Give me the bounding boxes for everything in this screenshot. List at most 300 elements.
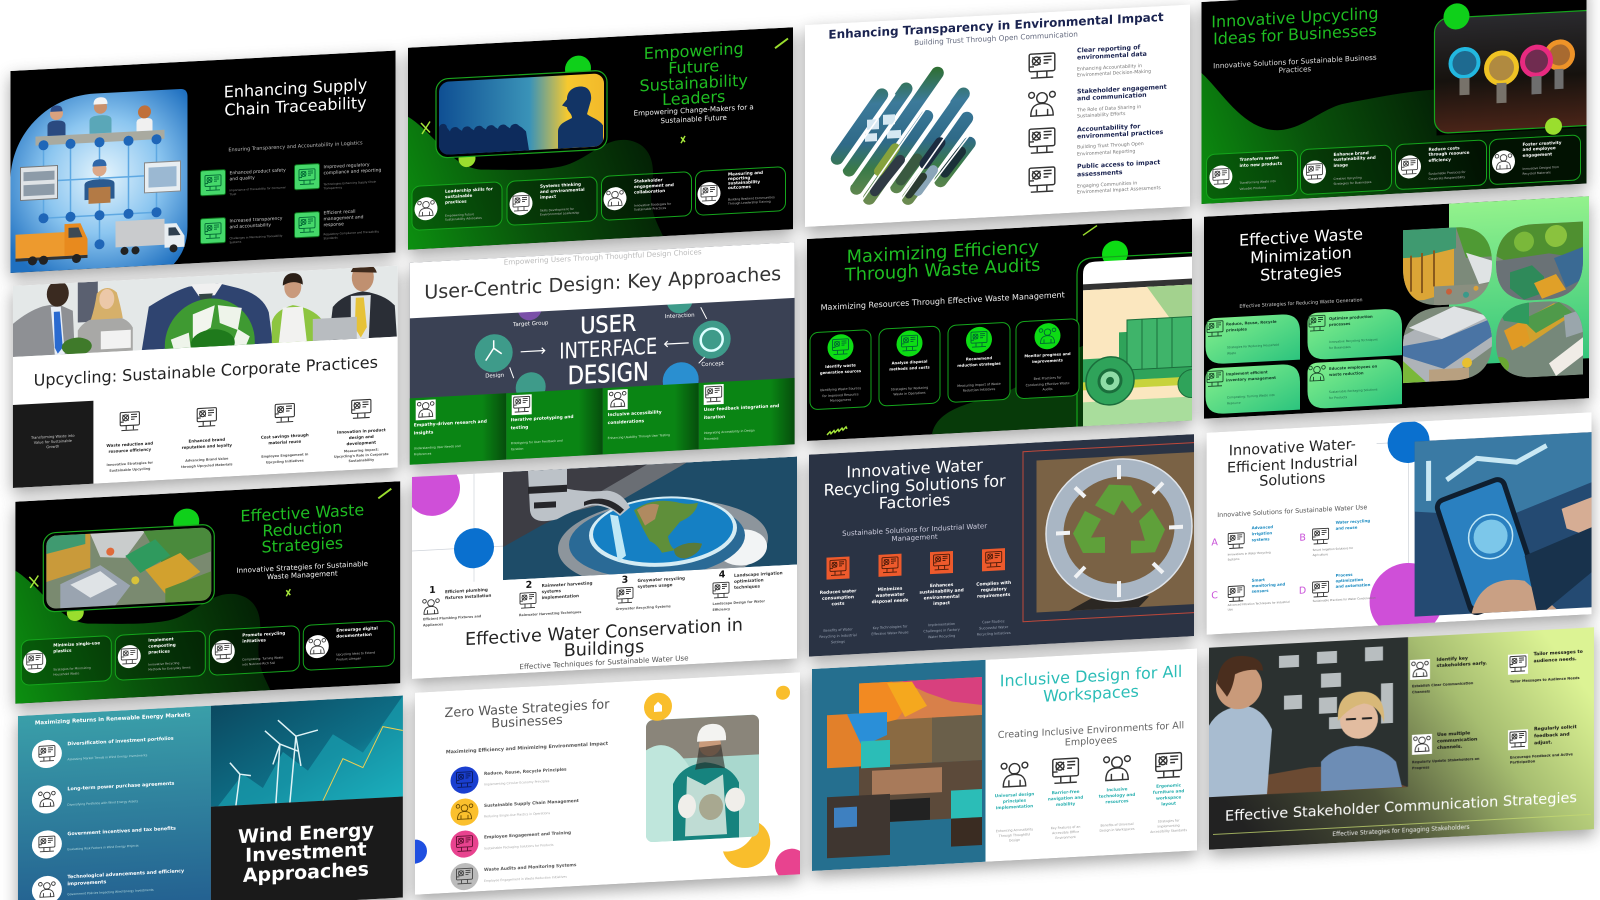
blue circle [1388,420,1430,464]
item: barrier-free: navigation and [1048,795,1083,801]
item: public access: Environmental Impact Assessments [1077,185,1161,196]
item: accountability [1028,124,1163,156]
card: monitor progress: Conducting Effective Waste [1026,381,1069,387]
item: identify stakeholders: Channels [1412,689,1430,694]
green background blob [408,103,663,250]
title: Effective Waste [1239,224,1363,250]
item: enhanced brand: through Upcycled Materials [181,462,232,469]
title: Empowering [644,39,744,63]
card: leadership: practices [445,199,467,205]
card: monitor progress: Monitor progress and [1024,351,1071,358]
item: sustainability: Enhances [930,582,954,589]
slide: Effective Waste Minimization Strategies [1204,196,1590,419]
spark: stroke top [1083,226,1097,235]
light green panel [1449,196,1589,366]
panel heading: Maximizing Returns in Renewable Energy Markets [35,712,191,727]
item: waste audits: Employee Engagement in Waste Reduction Initiatives [484,875,567,883]
decor: yellow home badge [644,692,672,722]
card: transform waste: into new products [1239,161,1283,168]
card: inventory management: inventory management [1226,375,1276,383]
feature: iterative prototyping: Iteration [511,447,524,451]
card: optimize production: processes [1329,321,1351,327]
benefit: recall management: Standards [324,236,338,240]
card: foster creativity: and employee [1522,145,1556,152]
subtitle: Innovative Solutions for Sustainable Business [1213,53,1377,70]
item: clear reporting: Environmental Decision-Making [1077,69,1151,79]
item: inclusive technology [1099,755,1135,833]
benefit: transparency: Challenges in Maintaining Traceability [230,234,283,240]
arrow: concept to interface [665,340,689,347]
item: water consumption: Reduces water [820,588,857,596]
benefit: product safety: and quality [230,175,255,182]
card: reduce costs: Sustainable Practices for [1428,170,1466,176]
isometric recycling plant image [43,507,214,623]
subtitle: Effective Strategies for Engaging Stakeholders [1332,825,1470,838]
card: composting: composting [148,642,176,649]
item: waste reduction [106,411,153,473]
arrow: target group to design [510,367,514,378]
feature: empathy-driven research: Empathy-driven research and [414,419,487,428]
item: technological advancements: improvements [67,879,106,887]
subtitle: Building Trust Through Open Communication [914,29,1078,47]
card: inventory management: Resource [1227,401,1241,405]
feature: inclusive accessibility [608,387,670,440]
subtitle: Effective Strategies for Reducing Waste Generation [1239,297,1363,310]
item C: Smart [1252,577,1265,583]
item: clear reporting: environmental data [1077,51,1147,62]
step 1: 1 [429,585,436,596]
step 3: Greywater recycling [637,575,685,583]
meeting photo [1209,637,1408,798]
item: technological advancements: Government Policies Impacting Wind Energy Investments [67,888,154,896]
tagline: Empowering Users Through Thoughtful Design Choices [504,247,702,267]
card: systems thinking: and environmental [540,187,585,194]
item: multiple channels [1412,730,1480,770]
card: educate employees: Educate employees on [1329,363,1377,371]
item: barrier-free: Accessible Office [1052,830,1079,835]
benefit: regulatory compliance: Improved regulatory [324,162,370,170]
user interface design wordmark: INTERFACE [559,335,657,365]
step 3 [616,571,685,611]
item: ergonomic furniture: Strategies for [1158,818,1180,824]
item: inclusive technology: resources [1105,798,1129,804]
feature: inclusive accessibility: Inclusive accessibility [608,409,662,418]
subtitle: Maximizing Efficiency and Minimizing Environmental Impact [446,741,609,756]
title: Innovative Water- [1229,437,1356,460]
item: waste reduction: resource efficiency [109,447,151,454]
step 4: optimization [734,577,764,584]
title: Businesses [491,713,563,732]
card: leadership: sustainable [445,193,472,199]
card: reduce costs: Reduce costs [1428,145,1460,152]
item: universal design [995,762,1034,843]
item A: A [1211,537,1218,548]
item: wastewater disposal: disposal needs [872,597,909,605]
card: educate employees: waste reduction [1329,370,1364,377]
item A: Systems [1228,557,1240,562]
title: Solutions [1259,470,1325,490]
item: barrier-free [1048,758,1083,840]
card: reduce costs: Corporate Responsibility [1428,175,1465,181]
arrow: interaction to concept [699,307,707,363]
step 2: implementation [542,593,579,600]
item: solicit feedback: Participation [1510,759,1536,765]
slide: Empowering Future Sustainability Leaders [408,27,793,250]
item: enhanced brand: Advancing Brand Value [185,456,229,463]
item: clear reporting [1029,44,1151,81]
subtitle: Sustainable Future [661,113,727,125]
subtitle: Creating Inclusive Environments for All [998,720,1184,741]
card: recommend strategies: Recommend [966,355,992,362]
workflow circles [475,285,731,409]
title: Enhancing Transparency in Environmental Impact [828,10,1164,42]
card: analyze disposal: Analyze disposal [892,359,927,365]
card: optimize production [1308,308,1402,360]
card: recycling initiatives: into Nutrient-Rich Soil [242,661,275,667]
benefit: product safety [200,166,287,198]
card: reduce reuse recycle: Strategies for Reducing Household [1227,343,1279,349]
item: solicit feedback: adjust. [1534,739,1552,746]
item: employee engagement: Employee Engagement and Training [484,830,571,841]
pink circle [1370,561,1444,639]
dark side panel: Growth [46,445,59,449]
item B: Agriculture [1313,552,1328,557]
item: public access: Public access to impact [1077,159,1160,171]
item: barrier-free: Environment [1055,835,1077,840]
feature: iterative prototyping: Iterative prototyping and [511,414,574,423]
title: Minimization [1250,243,1352,267]
spark: lime stroke [775,38,788,48]
item: identify stakeholders [1410,654,1487,695]
item: regulatory: Case Studies: [982,619,1005,624]
title: Reduction [262,517,342,541]
card: recommend strategies: Reduction Initiatives [963,387,996,393]
title: Effective Waste [240,500,364,526]
subtitle: Waste Management [267,569,338,581]
item: sustainable supply chain [450,792,579,826]
item: public access [1028,160,1161,194]
card: identify sources: Identify waste [825,362,856,369]
card: systems thinking: Environmental Leadership [540,211,579,217]
diagram labels [485,311,725,380]
item: sustainability: Challenges in Factory [923,628,960,634]
diagram labels: Interaction [665,313,695,320]
item: multiple channels: channels. [1437,744,1463,751]
feature: user feedback [704,381,779,441]
subtitle: Empowering Change-Makers for a [634,102,754,118]
feature: inclusive accessibility: considerations [608,418,645,426]
card: recycling initiatives: Composting: Turning Waste [242,655,284,662]
slide: Maximizing Efficiency Through Waste Audits [807,218,1206,441]
title: Maximizing Efficiency [847,237,1039,268]
item B: Water recycling [1336,518,1370,525]
benefit: product safety: Importance of Traceability for Consumer [230,185,287,192]
item: wastewater disposal: Minimizes [878,586,903,593]
truck phone illustration [1077,236,1206,427]
subtitle: Effective Techniques for Sustainable Water Use [519,653,689,671]
feature: user feedback: iteration [704,414,725,421]
item D: Process [1336,572,1353,578]
item: water consumption: costs [832,601,845,607]
step 2 [519,576,592,617]
subtitle: Innovative Solutions for Sustainable Water Use [1217,503,1367,519]
card: leadership: Sustainability Advocates [445,216,482,222]
item: employee engagement: Sustainable Packaging Solutions for Products [484,843,554,851]
step 4: Landscape Design for Water [712,599,765,606]
item: sustainable supply chain: Reducing Single-Use Plastics in Operations [484,811,550,819]
worker photo [646,714,759,842]
benefit: transparency: and accountability [230,222,271,230]
title: Innovative Upcycling [1211,4,1378,31]
guide lines [1377,412,1592,626]
card: inventory management: Composting: Turning Waste into [1227,393,1275,399]
dark side panel: Transforming Waste into [30,434,75,440]
item: multiple channels: communication [1437,736,1477,745]
item: inclusive technology: Inclusive [1107,786,1128,792]
item: enhanced brand [181,407,232,469]
spark: lime stroke [378,489,391,498]
item: barrier-free: Key Features of an [1051,825,1080,830]
item: universal design: Universal design [995,791,1034,798]
step 4: Landscape irrigation [734,570,783,578]
step 1 [423,582,491,627]
slide: Upcycling Sustainable Corporate Practices [13,261,398,488]
recycling ring photo [1023,443,1195,622]
item: public access: Engaging Communities in [1077,180,1137,190]
item: regulatory: Successful Water [979,625,1009,631]
card: analyze disposal: Waste in Operations [893,391,926,396]
dark side panel: Value for Sustainable [34,439,73,445]
feature: empathy-driven research: insights [414,429,434,436]
card: enhance brand [1300,145,1392,195]
feature: empathy-driven research [414,397,487,456]
card: foster creativity: Recycled Materials [1522,170,1551,176]
item: universal design: implementation [996,803,1033,810]
spark: zigzag [827,427,847,435]
item: regulatory: Complies with [976,580,1011,588]
card: enhance brand: Creative Upcycling [1333,175,1362,181]
card: transform waste [1206,150,1298,200]
subtitle: Innovative Strategies for Sustainable [237,559,368,575]
title: User-Centric Design: Key Approaches [424,262,781,304]
card: recycling initiatives: initiatives [242,637,266,644]
slide: Innovative Upcycling Ideas for Businesses [1202,0,1600,204]
item: universal design: principles [1003,798,1027,804]
card: minimize plastics: Strategies for Minimizing [53,666,91,672]
subtitle: Employees [1065,735,1117,749]
item: ergonomic furniture: Accessibility Standards [1150,828,1187,834]
card: reduce costs: through resource [1428,150,1470,157]
item: stakeholder engagement: Stakeholder engagement [1077,84,1167,96]
item: ergonomic furniture: Ergonomic [1156,782,1182,789]
card: monitor progress [1016,319,1079,399]
item D: Sustainable Practices for Water Conservation [1313,596,1376,603]
card: digital documentation: Encourage digital [336,625,378,633]
item A: Innovations in Water Recycling [1228,550,1271,557]
card: leadership: Empowering Future [445,212,474,218]
item B [1299,518,1370,558]
item: accountability: environmental practices [1077,129,1164,141]
card: reduce reuse recycle: Waste [1227,351,1236,355]
corporate team photo [13,266,398,357]
card: transform waste: Valuable Products [1239,186,1267,191]
slide: Enhancing Supply Chain Traceability [10,51,396,273]
card: foster creativity: engagement [1522,151,1552,158]
item: solicit feedback: Encourage Feedback and Active [1510,752,1573,760]
card: reduce reuse recycle: Reduce, Reuse, Recycle [1226,319,1277,327]
card: stakeholder engagement: Innovative Strategies for [634,202,672,208]
card: monitor progress: Best Practices for [1034,375,1062,381]
item: enhanced brand: Enhanced brand [189,437,225,444]
item: sustainable supply chain: Sustainable Supply Chain Management [484,798,579,809]
item A: Advanced [1252,524,1273,530]
feature: empathy-driven research: Preferences [414,452,432,456]
item: waste audits: Waste Audits and Monitoring Systems [484,862,577,873]
item: universal design: Design [1009,838,1020,843]
title: Future [668,56,719,78]
title: Chain Traceability [224,93,367,120]
feature: user feedback: User feedback integration and [704,403,779,413]
title: Strategies [1260,261,1342,285]
green feature band [410,378,795,465]
card: transform waste: Transforming Waste into [1239,179,1276,185]
benefit: regulatory compliance: Transparency [323,185,342,190]
slide: Wind Energy Investment Approaches [18,696,403,900]
item: technological advancements: Technological advancements and efficiency [67,868,185,880]
item A: systems [1252,536,1270,542]
decor: pink partial circle [775,848,807,882]
card: measuring outcomes: Through Leadership Training [727,199,771,206]
item: ergonomic furniture: Implementing [1158,823,1180,829]
item: diversification [32,733,174,769]
card: digital documentation: documentation [336,632,372,639]
item: tailor messages: Tailor messages to [1534,649,1584,657]
item: water consumption: Recycling in Industrial [819,633,857,639]
step 4: Efficiency [712,607,731,612]
card: composting [115,631,205,680]
card: composting: Methods for Everyday Items [148,665,191,672]
card: identify sources: generation sources [820,368,862,375]
card: stakeholder engagement: Stakeholder [634,177,663,184]
title: Through Waste Audits [844,255,1040,286]
card: minimize plastics [21,636,111,685]
card: optimize production: for Businesses [1329,345,1351,350]
item: enhanced brand: reputation and loyalty [182,442,232,450]
spark: lime cross left [420,121,686,144]
card: inventory management: Implement efficient [1226,369,1268,377]
benefit: product safety: Enhanced product safety [230,167,286,176]
item: wastewater disposal: wastewater [876,591,905,599]
item C [1211,576,1290,612]
step 4: techniques [734,583,761,590]
card: enhance brand: Strategies for Businesses [1333,180,1372,186]
item: water consumption [819,556,857,645]
item: water consumption: Settings [831,640,845,644]
slide: Zero Waste Strategies for Businesses [403,672,807,900]
card: educate employees: for Products [1329,395,1347,400]
item: cost savings: Upcycling Initiatives [266,459,304,465]
item: cost savings: Employee Engagement in [261,452,309,459]
speaker image [436,54,607,169]
item A: irrigation [1252,530,1272,536]
feature: iterative prototyping: Prototyping for User Feedback and [511,439,563,445]
item: ergonomic furniture [1150,752,1187,834]
benefit: recall management: response [324,221,344,228]
item: ergonomic furniture: furniture and [1153,788,1184,795]
item: stakeholder engagement: and communication [1077,92,1147,103]
benefit: regulatory compliance: Technologies Enhancing Supply Chain [323,180,377,186]
item: stakeholder engagement: The Role of Data Sharing in [1076,104,1141,114]
item: waste reduction: Innovative Strategies for [107,461,153,467]
card: systems thinking: Systems thinking [540,182,581,189]
smartphone photo [1415,432,1592,621]
item: reduce reuse recycle [450,761,567,794]
title: Strategies [261,533,343,557]
item: incentives: Evaluating Risk Factors in Wind Energy Projects [67,844,139,851]
item: waste audits [450,857,577,891]
item C: monitoring and [1252,582,1285,588]
item: barrier-free: mobility [1056,801,1075,807]
faucet and globe photo [503,457,797,596]
item: sustainability: impact [933,600,950,607]
item: ergonomic furniture: workspace [1156,794,1181,801]
guide lines [412,472,503,585]
benefit: recall management: Regulatory Compliance and Traceability [324,229,379,236]
benefit: recall management: management and [324,214,364,222]
slide: Inclusive Design for All Workspaces [812,649,1197,871]
feature: inclusive accessibility: Enhancing Usability Through User Testing [608,433,670,440]
step 4 [712,566,783,612]
item: power purchase: Long-term power purchase agreements [67,781,175,792]
decor: blue partial circle [403,839,427,864]
card: stakeholder engagement [602,172,692,220]
card: measuring outcomes: Building Resilient Communities [728,195,775,202]
item: water consumption: consumption [822,594,854,602]
item C: C [1211,590,1218,601]
card: measuring outcomes: sustainability [728,179,760,186]
card: monitor progress: improvements [1032,357,1064,364]
step 2: Rainwater harvesting [542,580,592,588]
card: measuring outcomes: outcomes [728,184,751,190]
item: sustainability [919,550,964,640]
title: Upcycling: Sustainable Corporate Practices [34,353,378,390]
item: cost savings [261,403,309,465]
card: recommend strategies: reduction strategies [957,361,1002,368]
benefit: regulatory compliance: compliance and reporting [324,167,381,176]
item D: and automation [1336,582,1371,589]
item: diversification: Assessing Market Trends in Wind Energy Investments [67,753,148,761]
feature: user feedback: Integrating Accessibility in Design [704,428,755,435]
item: wastewater disposal: Effective Water Reuse [871,630,909,636]
title: Innovative Water [846,455,983,482]
decor: yellow crescent [723,821,770,869]
item: innovation: development [347,440,376,446]
card: minimize plastics: plastics [53,648,72,654]
item: diversification: Diversification of investment portfolios [67,736,174,747]
teal side panel [812,660,986,871]
item: innovation [334,398,389,464]
step 4: 4 [719,569,726,581]
item: multiple channels: Progress [1412,765,1429,770]
item: reduce reuse recycle: Reduce, Reuse, Recycle Principles [484,767,567,777]
title: Efficient Industrial [1227,454,1358,477]
card: composting: practices [148,648,170,655]
card: measuring outcomes [696,167,786,215]
title: Recycling Solutions for [824,471,1006,500]
card: systems thinking: Skills Development for [540,207,575,213]
item C: Advanced Filtration Techniques for Industrial [1228,600,1290,607]
item: public access: assessments [1077,169,1123,179]
